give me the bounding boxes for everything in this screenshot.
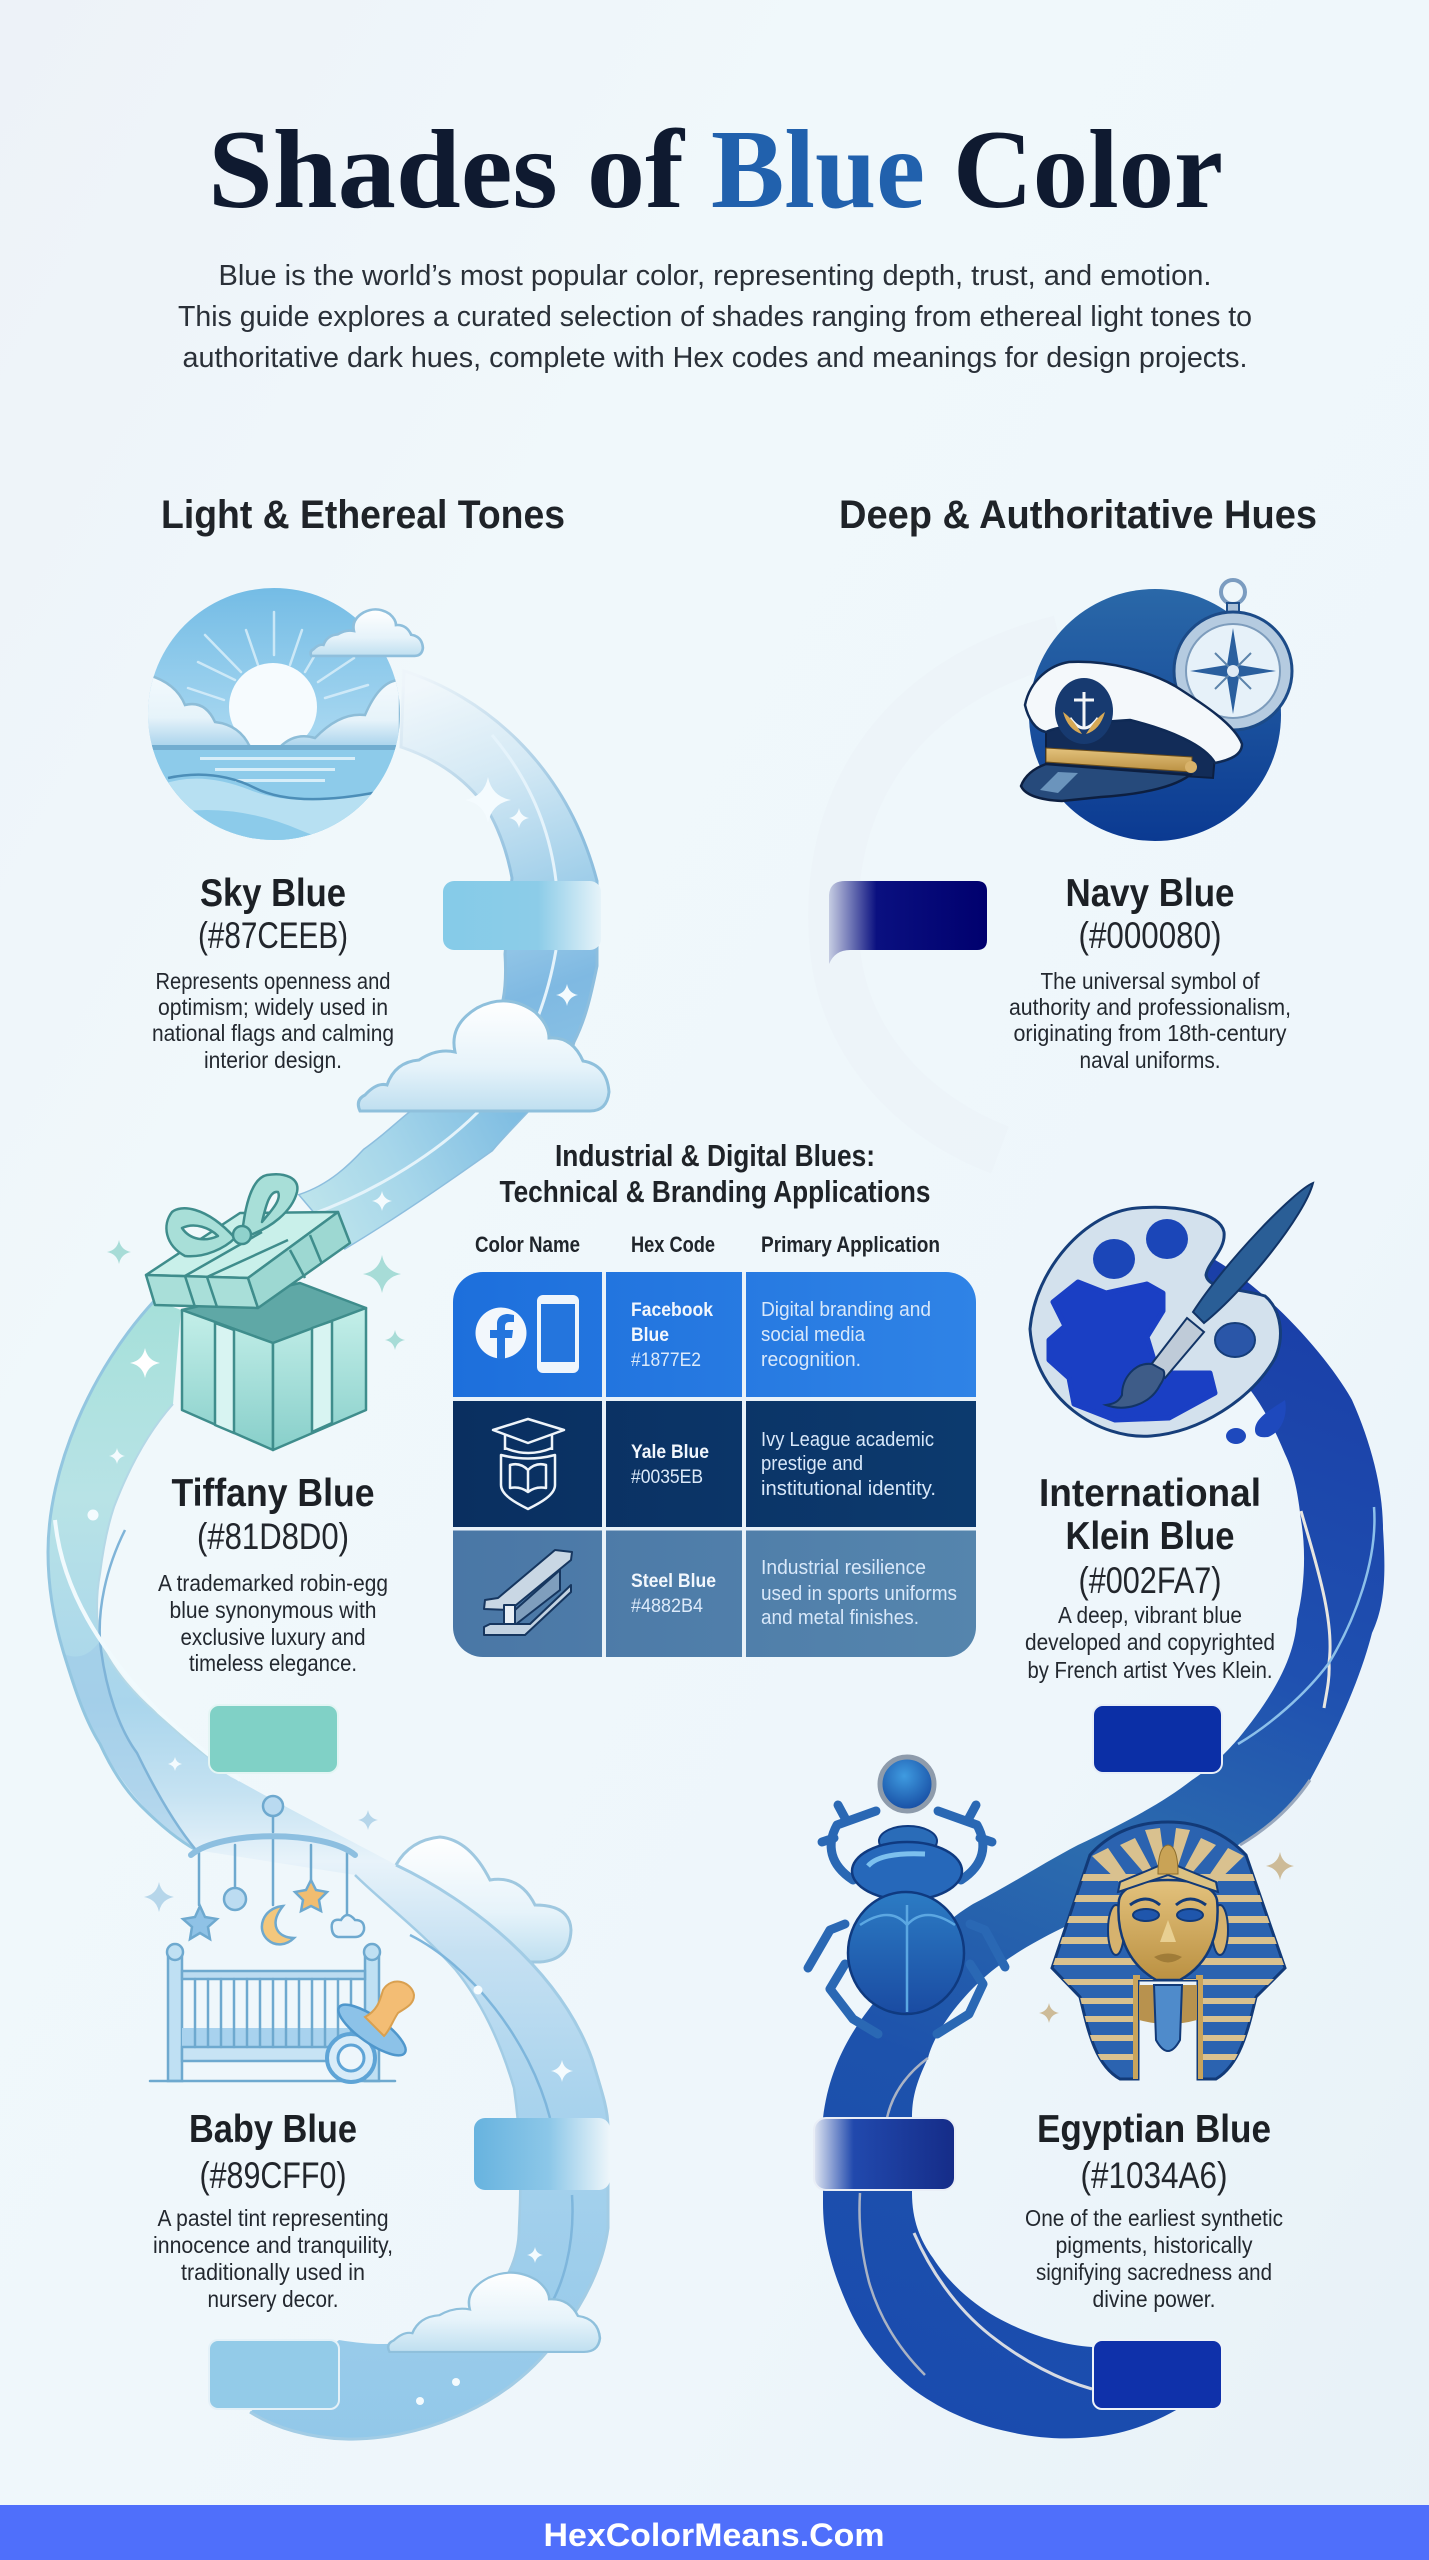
- swatch: egyptian blue side: [814, 2118, 955, 2190]
- drops: paint: [1226, 1400, 1286, 1444]
- row: steel blue: #4882B4: [631, 1596, 703, 1617]
- row: steel blue: used in sports uniforms: [761, 1583, 957, 1605]
- heading: table title: [500, 1138, 930, 1209]
- panel: sky blue: [140, 588, 609, 1111]
- ribbon: klein to egyptian: [823, 1257, 1384, 2438]
- intro paragraph: authoritative dark hues, complete with Hex codes and meanings for design projects.: [182, 342, 1248, 374]
- row: facebook blue: Facebook: [631, 1300, 713, 1321]
- swatch: tiffany blue: [209, 1705, 338, 1773]
- intro paragraph: Blue is the world’s most popular color, representing depth, trust, and emotion.: [218, 260, 1212, 292]
- row: facebook blue: social media: [761, 1324, 866, 1346]
- row: facebook blue: [631, 1299, 931, 1371]
- row: yale blue: institutional identity.: [761, 1478, 936, 1500]
- row: yale blue: [631, 1429, 936, 1500]
- table header row: [475, 1232, 940, 1257]
- text: tiffany blue description: timeless elegance.: [189, 1650, 357, 1676]
- label: klein blue name: International: [1039, 1472, 1261, 1515]
- text: navy blue description: authority and professionalism,: [1009, 994, 1291, 1020]
- text: sky blue description: interior design.: [204, 1047, 342, 1073]
- text: klein blue description: developed and copyrighted: [1025, 1629, 1275, 1655]
- text: sky blue description: national flags and calming: [152, 1020, 394, 1046]
- row: yale blue: #0035EB: [631, 1467, 703, 1488]
- label: navy blue hex: (#000080): [1078, 915, 1222, 956]
- heading: table title: Industrial & Digital Blues:: [555, 1138, 875, 1173]
- label: egyptian blue name: Egyptian Blue: [1037, 2108, 1271, 2151]
- table header row: Primary Application: [761, 1232, 940, 1257]
- ribbon: tiffany and baby blue loop: [48, 1300, 608, 2439]
- text: tiffany blue description: blue synonymous with: [170, 1597, 376, 1623]
- text: egyptian blue description: divine power.: [1092, 2286, 1216, 2312]
- sparkles: baby: [144, 1810, 573, 2405]
- text: baby blue description: traditionally used in: [181, 2259, 365, 2285]
- panel: international klein blue: [1025, 1183, 1313, 1773]
- heading: deep hues: Deep & Authoritative Hues: [839, 493, 1317, 537]
- table header row: Color Name: [475, 1232, 580, 1257]
- label: sky blue name: Sky Blue: [200, 872, 346, 915]
- intro paragraph: [178, 260, 1252, 374]
- text: egyptian blue description: signifying sacredness and: [1036, 2259, 1272, 2285]
- icon: captain hat and compass: [1021, 580, 1292, 841]
- icon: pharaoh mask: [1040, 1822, 1300, 2080]
- intro paragraph: This guide explores a curated selection of shades ranging from ethereal light tones to: [178, 301, 1252, 333]
- label: tiffany blue hex: (#81D8D0): [197, 1516, 349, 1557]
- text: tiffany blue description: [158, 1570, 388, 1676]
- icon: crib mobile and pacifier: [150, 1796, 414, 2082]
- footer bar: HexColorMeans.Com: [544, 2517, 884, 2553]
- label: baby blue hex: (#89CFF0): [200, 2155, 346, 2196]
- row: yale blue: prestige and: [761, 1453, 863, 1475]
- row: yale blue: Ivy League academic: [761, 1429, 934, 1451]
- footer bar: [0, 2505, 1429, 2560]
- swatch: sky blue: [443, 881, 601, 950]
- page title: Color: [953, 108, 1223, 232]
- row: yale blue: Yale Blue: [631, 1442, 709, 1463]
- text: egyptian blue description: One of the earliest synthetic: [1025, 2205, 1283, 2231]
- ribbon: faint navy arc: [833, 640, 1060, 1150]
- page title: Shades of: [208, 108, 686, 232]
- row: steel blue: and metal finishes.: [761, 1607, 919, 1629]
- text: baby blue description: A pastel tint representing: [158, 2205, 388, 2231]
- swatch: baby blue side: [474, 2118, 610, 2190]
- row: facebook blue: Blue: [631, 1325, 669, 1346]
- text: navy blue description: originating from 18th-century: [1014, 1020, 1287, 1046]
- label: egyptian blue hex: (#1034A6): [1080, 2155, 1228, 2196]
- sparkles: egyptian: [1039, 1852, 1294, 2023]
- panel: navy blue: [829, 580, 1292, 1073]
- sparkles: gift: [88, 1191, 405, 1771]
- panel: tiffany blue: [88, 1174, 405, 1773]
- page title: Blue: [711, 108, 925, 232]
- text: baby blue description: nursery decor.: [208, 2286, 338, 2312]
- label: sky blue hex: (#87CEEB): [198, 915, 348, 956]
- table header row: Hex Code: [631, 1232, 715, 1257]
- heading: light tones: Light & Ethereal Tones: [161, 493, 565, 537]
- icon: gift box: [146, 1174, 366, 1450]
- cloud: baby ribbon: [388, 2273, 600, 2352]
- label: klein blue name: Klein Blue: [1066, 1515, 1234, 1558]
- row: steel blue: [631, 1557, 957, 1629]
- label: baby blue name: Baby Blue: [189, 2108, 357, 2151]
- row: steel blue: Industrial resilience: [761, 1557, 926, 1579]
- panel: egyptian blue: [808, 1757, 1300, 2409]
- icon: steel beam: [484, 1550, 572, 1635]
- row: facebook blue: #1877E2: [631, 1350, 701, 1371]
- table body: [453, 1272, 976, 1657]
- cloud: behind baby ribbon: [396, 1837, 571, 1962]
- text: tiffany blue description: exclusive luxury and: [180, 1624, 366, 1650]
- icon: sun over sea: [140, 588, 423, 850]
- text: sky blue description: optimism; widely used in: [158, 994, 388, 1020]
- icon: graduation cap and shield: [493, 1419, 564, 1509]
- icon: facebook and phone: [476, 1295, 579, 1373]
- text: sky blue description: Represents openness and: [156, 968, 390, 994]
- label: klein blue name: [1039, 1472, 1261, 1558]
- panel: industrial and digital table: [453, 1138, 976, 1657]
- text: egyptian blue description: pigments, historically: [1056, 2232, 1253, 2258]
- text: navy blue description: The universal symbol of: [1040, 968, 1260, 994]
- sparkles: sky ribbon: [465, 777, 578, 1006]
- swatch: navy blue: [829, 881, 987, 964]
- row: steel blue: Steel Blue: [631, 1571, 716, 1592]
- text: baby blue description: innocence and tranquility,: [153, 2232, 393, 2258]
- ribbon: sky blue to tiffany: [300, 671, 597, 1248]
- swatch: baby blue: [209, 2340, 339, 2409]
- cloud: sky ribbon: [358, 1001, 609, 1111]
- text: tiffany blue description: A trademarked robin-egg: [158, 1570, 388, 1596]
- text: sky blue description: [152, 968, 394, 1073]
- swatch: egyptian blue: [1093, 2340, 1222, 2409]
- text: egyptian blue description: [1025, 2205, 1283, 2312]
- icon: palette and brush: [1030, 1183, 1313, 1436]
- text: klein blue description: by French artist Yves Klein.: [1028, 1657, 1272, 1683]
- swatch: klein blue: [1093, 1705, 1222, 1773]
- text: navy blue description: [1009, 968, 1291, 1073]
- label: tiffany blue name: Tiffany Blue: [172, 1472, 374, 1515]
- row: facebook blue: Digital branding and: [761, 1299, 931, 1321]
- row: facebook blue: recognition.: [761, 1349, 861, 1371]
- heading: table title: Technical & Branding Applications: [500, 1174, 930, 1209]
- text: klein blue description: [1025, 1602, 1275, 1683]
- page title: [208, 108, 1223, 232]
- icon: scarab beetle: [808, 1757, 1005, 2034]
- label: klein blue hex: (#002FA7): [1078, 1560, 1222, 1601]
- text: klein blue description: A deep, vibrant blue: [1058, 1602, 1242, 1628]
- panel: baby blue: [144, 1796, 610, 2409]
- label: navy blue name: Navy Blue: [1066, 872, 1234, 915]
- text: navy blue description: naval uniforms.: [1080, 1047, 1220, 1073]
- text: baby blue description: [153, 2205, 393, 2312]
